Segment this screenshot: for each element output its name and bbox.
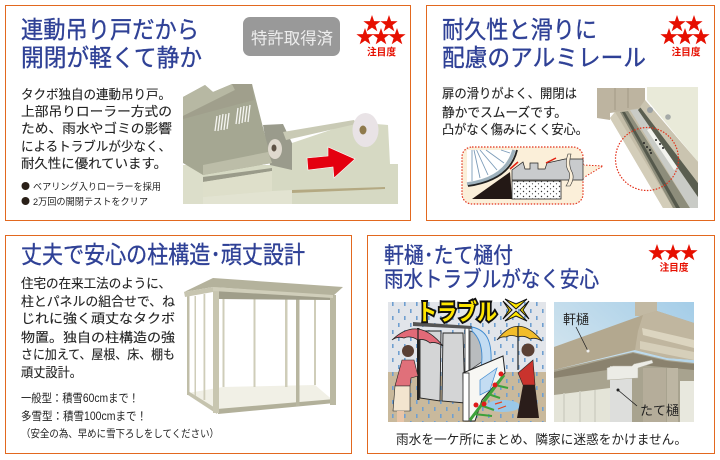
- puddle and flowers: [470, 372, 520, 420]
- body text: door description: ため、雨水やゴミの影響: [21, 121, 172, 136]
- person with pink umbrella: [392, 328, 443, 422]
- snow load specifications: （安全の為、早めに雪下ろしをしてください）: [21, 427, 219, 440]
- body text: structure description: 住宅の在来工法のように、: [21, 276, 171, 291]
- bullet list: roller features: [22, 181, 161, 208]
- snow load specifications: 一般型：積雪60cmまで！: [21, 391, 139, 405]
- icon: anger mark: [503, 299, 529, 321]
- heading: gutters and downspouts: [384, 243, 599, 292]
- badge: patent acquired: 特許取得済: [251, 29, 333, 48]
- gutter callout: 軒樋: [563, 312, 589, 327]
- body text: door description: 上部吊りローラー方式の: [21, 104, 172, 119]
- snow load specifications: [21, 391, 219, 440]
- body text: structure description: 頑丈設計。: [21, 365, 82, 380]
- heading: linked hanging door: 開閉が軽くて静か: [21, 45, 202, 72]
- illustration: storage shed frame: [184, 278, 343, 414]
- rating: three stars: 注目度: [660, 261, 688, 274]
- body text: rail description: 静かでスムーズです。: [442, 105, 567, 120]
- downspout callout: たて樋: [640, 403, 679, 418]
- heading: gutters and downspouts: 雨水トラブルがなく安心: [384, 267, 599, 292]
- person with yellow umbrella: [497, 326, 542, 418]
- rating: five stars: 注目度: [367, 46, 396, 58]
- body text: structure description: じれに強く頑丈なタクボ: [21, 311, 175, 326]
- panel: aluminum rail: [426, 6, 714, 220]
- photo: aluminum rail close-up: [597, 87, 698, 208]
- rating: five stars: [660, 15, 710, 58]
- arrow: door opening direction: [307, 147, 355, 178]
- body text: structure description: さに加えて、屋根、床、棚も: [21, 347, 175, 362]
- body text: structure description: 柱とパネルの組合せで、ね: [21, 294, 175, 309]
- rating: three stars: [648, 244, 698, 274]
- panel: column structure: [6, 236, 352, 454]
- heading: linked hanging door: [21, 17, 202, 72]
- heading: aluminum rail: 耐久性と滑りに: [442, 17, 597, 44]
- photo: door roller mechanism: [183, 84, 398, 204]
- trouble label: トラブル: [417, 299, 497, 325]
- heading: aluminum rail: [442, 17, 646, 72]
- body text: door description: [21, 87, 172, 171]
- water falling over shed: [472, 327, 497, 395]
- body text: rail description: 扉の滑りがよく、開閉は: [442, 86, 577, 101]
- callout: rail cross-section: [462, 147, 603, 204]
- bullet list: roller features: ベアリング入りローラーを採用: [33, 181, 161, 193]
- heading: aluminum rail: 配慮のアルミレール: [442, 45, 646, 72]
- badge: patent acquired: [243, 17, 340, 56]
- body text: door description: 耐久性に優れています。: [21, 156, 167, 171]
- neighbouring wall: [463, 356, 505, 421]
- heading: column structure: 丈夫で安心の柱構造･頑丈設計: [21, 242, 305, 269]
- photo: eaves gutter and downspout: [554, 302, 694, 422]
- body text: structure description: 物置。独自の柱構造の強: [21, 330, 175, 345]
- heading: linked hanging door: 連動吊り戸だから: [21, 17, 199, 44]
- snow load specifications: 多雪型：積雪100cmまで！: [21, 409, 147, 423]
- caption: rainwater message: 雨水を一ケ所にまとめ、隣家に迷惑をかけません。: [396, 432, 687, 447]
- heading: gutters and downspouts: 軒樋･たて樋付: [384, 243, 513, 268]
- rating: five stars: [356, 15, 406, 58]
- bullet list: roller features: 2万回の開閉テストをクリア: [33, 197, 148, 208]
- body text: rail description: [442, 86, 588, 137]
- body text: door description: タクボ独自の連動吊り戸。: [21, 87, 171, 102]
- highlight circle on rail: [616, 128, 678, 190]
- panel: gutters and downspouts: [368, 236, 714, 454]
- shed with wall panels: [413, 322, 485, 403]
- body text: structure description: [21, 276, 175, 380]
- illustration: rain trouble without gutters: [388, 299, 546, 422]
- panel: linked hanging door: [6, 6, 410, 220]
- body text: rail description: 凸がなく傷みにくく安心。: [442, 122, 588, 137]
- body text: door description: によるトラブルが少なく、: [21, 139, 171, 154]
- rating: five stars: 注目度: [672, 46, 700, 58]
